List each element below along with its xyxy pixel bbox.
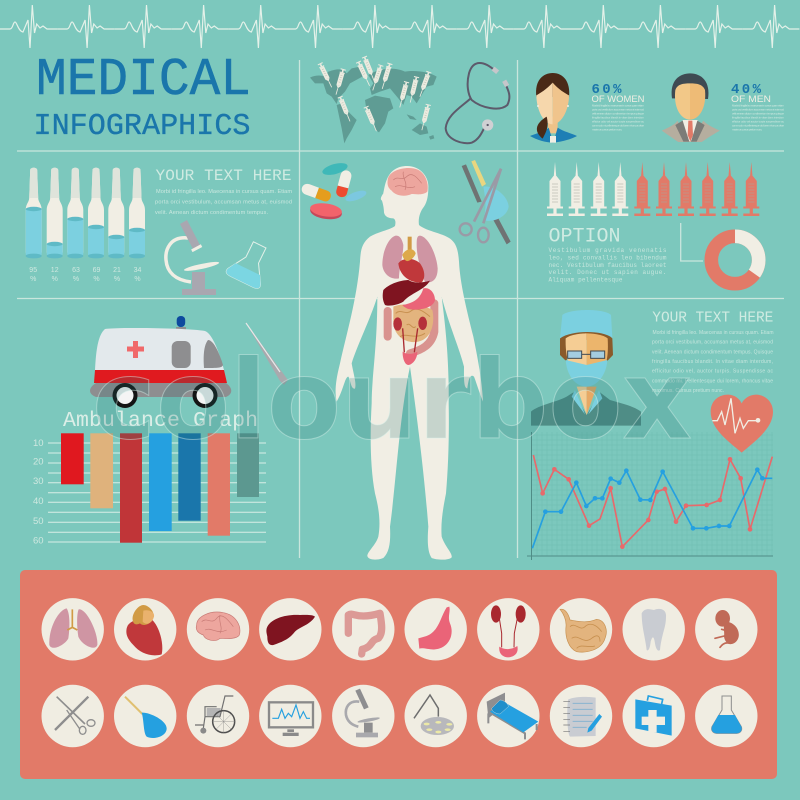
ambulance xyxy=(90,316,231,408)
donut chart xyxy=(681,223,759,284)
icon: liver xyxy=(266,615,315,645)
ampoule chart: 34 xyxy=(134,267,141,274)
option text: velit. Donec ut sapien augue. xyxy=(548,269,666,276)
ambulance bar chart xyxy=(33,433,266,546)
organ: brain xyxy=(387,168,428,196)
microscope xyxy=(166,220,220,295)
icon: microscope xyxy=(346,689,380,737)
woman statistic: velit aenean dictum condimentum tempus quisque xyxy=(592,112,644,116)
icon: monitor xyxy=(269,702,313,736)
icon: heart xyxy=(126,605,162,655)
title xyxy=(34,50,251,144)
text block: your text here right: YOUR TEXT HERE xyxy=(652,310,773,326)
woman statistic: 60% xyxy=(592,82,622,98)
man statistic: maximus cursus pretium nunc xyxy=(732,128,763,132)
woman statistic: OF WOMEN xyxy=(592,94,645,105)
option text xyxy=(548,226,667,284)
ambulance bar chart: 50 xyxy=(33,516,44,527)
organ: kidneys and bladder xyxy=(393,317,427,365)
ambulance bar chart: 20 xyxy=(33,456,44,468)
woman avatar xyxy=(530,73,577,143)
man statistic: porta orci vestibulum accumsan metus at euismod xyxy=(732,108,784,112)
icon: stomach xyxy=(418,607,452,649)
world map with syringes xyxy=(310,56,437,143)
woman statistic: commodo mi pellentesque dui lorem rhoncus vitae xyxy=(592,124,644,128)
icon circles xyxy=(41,598,757,747)
icon: wheelchair xyxy=(195,696,235,734)
icon: kidneys xyxy=(491,605,526,657)
organs group xyxy=(382,236,438,365)
text block: your text here: Morbi id fringilla leo. Maecenas in cursus quam. Etiam xyxy=(156,189,292,195)
text block: your text here: velit. Aenean dictum condimentum tempus. xyxy=(155,210,268,216)
ampoule chart: % xyxy=(93,276,100,283)
organ: liver xyxy=(383,280,430,306)
organ: stomach xyxy=(402,288,435,310)
ambulance bar chart: 10 xyxy=(33,438,44,449)
text block: your text here right: commodo mi. Pellentesque dui lorem, rhoncus vitae xyxy=(652,378,773,384)
ECG line across top xyxy=(0,5,799,48)
surgical instruments xyxy=(460,160,511,244)
thermometer xyxy=(245,322,288,385)
man statistic: fringilla faucibus blandit in vitae diam interdum xyxy=(732,116,785,120)
ampoule chart: % xyxy=(73,276,79,283)
organ: intestines xyxy=(388,303,434,353)
stethoscope xyxy=(446,63,509,143)
option text: Vestibulum gravida venenatis xyxy=(548,247,667,254)
text block: your text here xyxy=(155,167,292,216)
ampoule chart: 21 xyxy=(113,267,121,274)
ambulance bar chart: 60 xyxy=(33,536,44,546)
woman statistic: efficitur odio vel auctor turpis suspendisse ac xyxy=(592,120,645,124)
woman statistic xyxy=(592,82,645,132)
ampoule chart: 95 xyxy=(29,267,37,274)
icon: tooth xyxy=(642,609,666,651)
ampoule chart xyxy=(26,168,145,283)
ampoule chart: % xyxy=(30,276,36,283)
watermark: colourbox xyxy=(92,336,692,464)
option text: OPTION xyxy=(548,226,620,248)
text block: your text here: YOUR TEXT HERE xyxy=(156,167,292,185)
man statistic: velit aenean dictum condimentum tempus quisque xyxy=(732,112,784,116)
icon: fetus xyxy=(715,610,739,647)
icon: lungs xyxy=(49,608,97,648)
organ: heart xyxy=(398,237,424,282)
text block: your text here right: velit. Aenean dictum condimentum tempus. Quisque xyxy=(652,350,773,356)
ampoule chart: 69 xyxy=(93,267,100,274)
heart icon with pulse xyxy=(711,395,773,453)
icon: flask xyxy=(712,696,742,733)
ampoule chart: % xyxy=(52,276,58,283)
text block: your text here right: efficitur odio vel, auctor turpis. Suspendisse ac xyxy=(652,369,774,375)
man statistic: Morbi id fringilla leo maecenas in cursus quam etiam xyxy=(732,104,785,108)
text block: your text here right xyxy=(652,310,774,394)
ambulance bar chart: 30 xyxy=(33,476,44,487)
ambulance graph title: Ambulance Graph xyxy=(63,409,258,433)
woman statistic: fringilla faucibus blandit in vitae diam interdum xyxy=(592,116,645,120)
icon: scalpel and scissors xyxy=(55,697,95,734)
ampoule chart: % xyxy=(114,276,120,283)
woman statistic: porta orci vestibulum accumsan metus at euismod xyxy=(592,108,644,112)
title: INFOGRAPHICS xyxy=(34,109,250,144)
woman statistic: maximus cursus pretium nunc xyxy=(592,128,623,132)
man statistic xyxy=(731,82,785,132)
icon: hospital bed xyxy=(487,693,538,739)
woman statistic: Morbi id fringilla leo maecenas in cursus quam etiam xyxy=(592,104,645,108)
human body silhouette xyxy=(336,166,483,560)
icon: brain xyxy=(196,612,240,641)
man statistic: commodo mi pellentesque dui lorem rhoncus vitae xyxy=(732,124,784,128)
title: MEDICAL xyxy=(36,50,251,110)
ambulance bar chart: 40 xyxy=(33,496,44,507)
man statistic: 40% xyxy=(731,82,762,98)
ampoule chart: 63 xyxy=(72,267,80,274)
panel: medical icons xyxy=(20,570,777,779)
icon: clipboard xyxy=(563,697,602,737)
text block: your text here right: Morbi id fringilla leo. Maecenas in cursus quam. Etiam xyxy=(652,330,774,336)
organ: lungs xyxy=(382,236,438,283)
option text: Aliquam pellentesque xyxy=(548,276,623,284)
doctor xyxy=(531,310,641,426)
flask xyxy=(225,237,276,290)
option text: nec. Vestibulum faucibus laoreet xyxy=(548,262,666,269)
text block: your text here right: fringilla faucibus blandit. In vitae diam interdum, xyxy=(652,359,773,365)
icon: small intestine xyxy=(560,609,606,652)
text block: your text here: porta orci vestibulum, accumsan metus at, euismod xyxy=(155,200,292,206)
text block: your text here right: maximus. Cursus pretium nunc. xyxy=(652,388,724,394)
ampoule chart: 12 xyxy=(51,267,59,274)
man statistic: OF MEN xyxy=(731,94,771,105)
man avatar xyxy=(662,73,720,142)
icon: surgical lamp xyxy=(414,695,454,735)
man statistic: efficitur odio vel auctor turpis suspendisse ac xyxy=(732,120,785,124)
option text: leo, sed convallis leo bibendum xyxy=(548,254,667,262)
icon: large intestine xyxy=(348,613,382,654)
icon: first aid kit xyxy=(635,696,672,736)
ampoule chart: % xyxy=(134,276,141,283)
icon: enema bulb xyxy=(125,697,167,738)
pills xyxy=(300,161,368,221)
syringe row xyxy=(547,162,759,216)
line chart xyxy=(527,432,773,560)
text block: your text here right: porta orci vestibulum, accumsan metus at, euismod xyxy=(652,340,773,346)
